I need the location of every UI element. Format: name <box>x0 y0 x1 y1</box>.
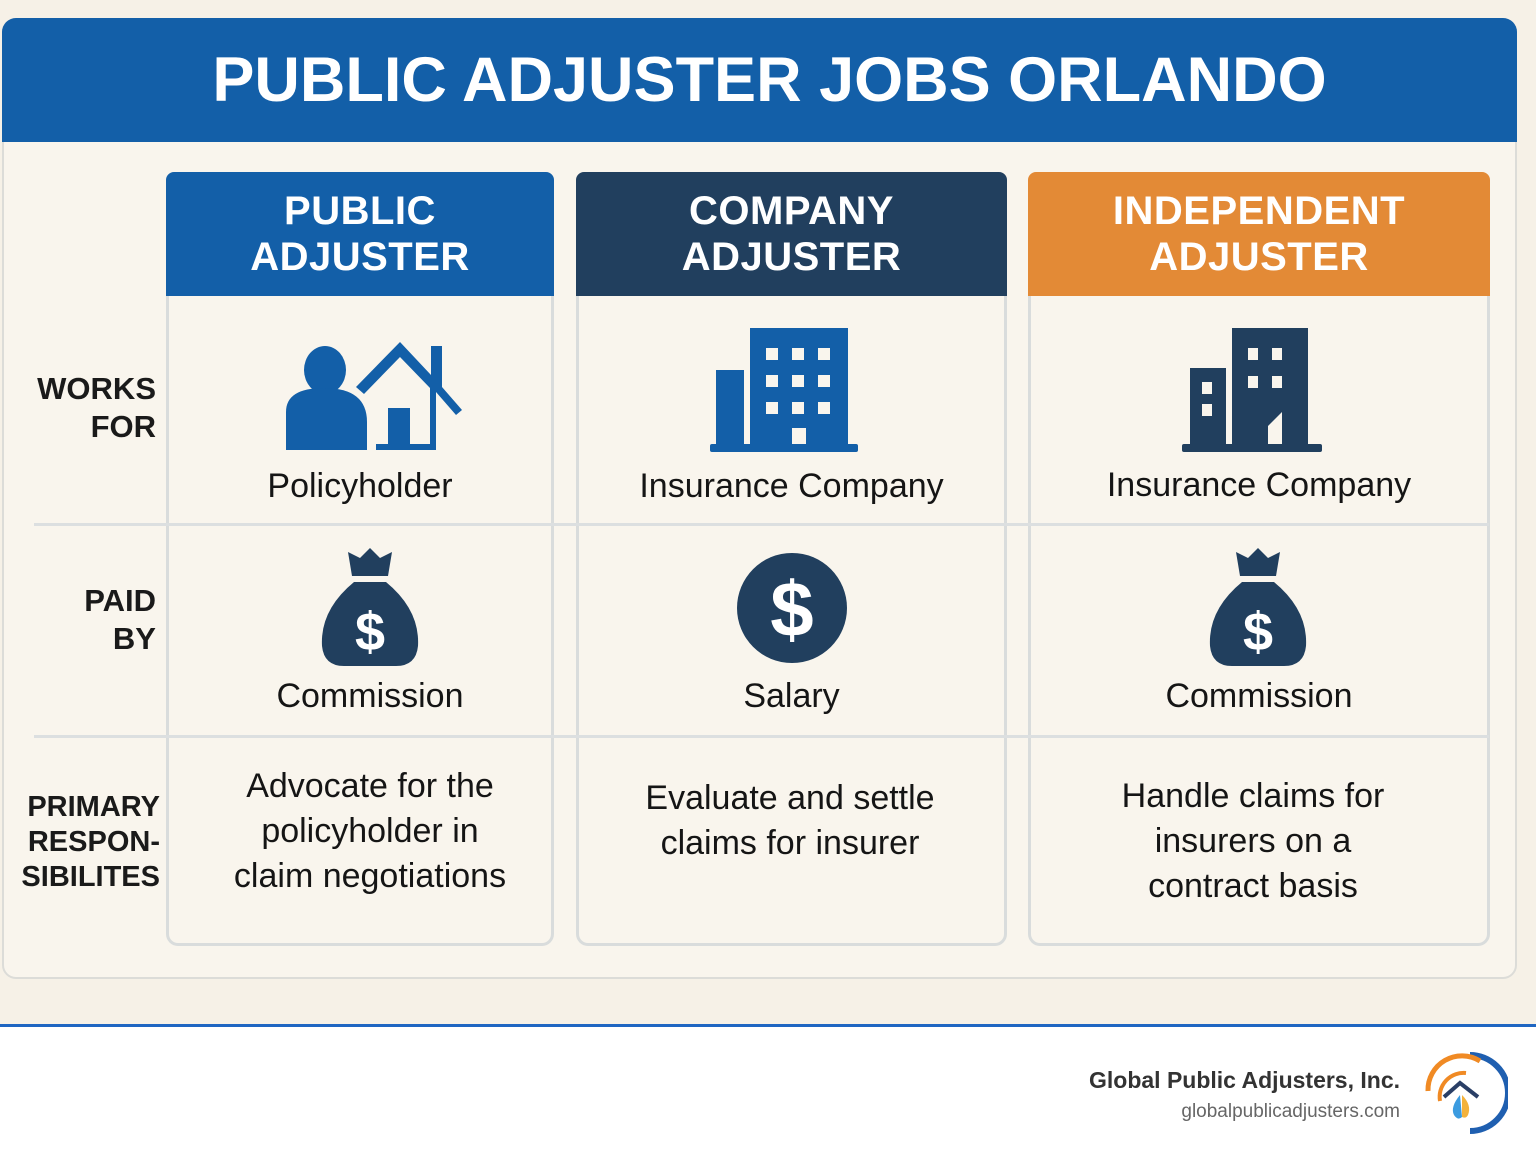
icon: dollar coin: $ <box>770 565 814 653</box>
header: company adjuster: COMPANY <box>689 189 894 233</box>
text: commission 2: Commission <box>1165 677 1353 715</box>
header: public adjuster: PUBLIC <box>284 189 436 233</box>
label: primary responsibilities: SIBILITES <box>21 861 160 893</box>
icon: office building <box>710 328 858 452</box>
text: insurance company 2: Insurance Company <box>1107 466 1411 504</box>
text: public responsibilities: claim negotiations <box>234 857 506 895</box>
header: independent adjuster: ADJUSTER <box>1149 235 1369 279</box>
icon: person and house <box>286 342 462 450</box>
column: public adjuster <box>166 294 554 946</box>
label: paid by <box>84 583 156 656</box>
label: primary responsibilities: RESPON- <box>28 826 160 858</box>
title: PUBLIC ADJUSTER JOBS ORLANDO <box>212 45 1327 115</box>
label: paid by: BY <box>113 621 156 656</box>
icon: money bag 2: $ <box>1243 602 1273 662</box>
icon: money bag 1: $ <box>355 602 385 662</box>
icon: money bag 1 <box>322 548 418 666</box>
icon: money bag 2 <box>1210 548 1306 666</box>
text: salary: Salary <box>743 677 840 715</box>
text: public responsibilities <box>234 767 506 895</box>
label: works for <box>37 371 156 444</box>
text: insurance company: Insurance Company <box>639 467 944 505</box>
logo <box>1426 1052 1508 1134</box>
label: works for: FOR <box>91 409 156 444</box>
title <box>2 18 1517 142</box>
header: independent adjuster: INDEPENDENT <box>1113 189 1405 233</box>
header: independent adjuster <box>1028 172 1490 296</box>
company name: Global Public Adjusters, Inc. <box>1089 1067 1400 1093</box>
column: independent adjuster <box>1028 294 1490 946</box>
text: public responsibilities: policyholder in <box>261 812 479 850</box>
icon: dark building <box>1182 328 1322 452</box>
label: works for: WORKS <box>37 371 156 406</box>
text: commission 1: Commission <box>276 677 464 715</box>
row dividers <box>34 523 1489 526</box>
footer <box>0 1024 1536 1154</box>
header: company adjuster <box>576 172 1007 296</box>
text: company responsibilities <box>645 779 935 862</box>
text: company responsibilities: claims for insurer <box>661 824 919 862</box>
text: independent responsibilities: contract basis <box>1148 867 1358 905</box>
text: policyholder: Policyholder <box>267 467 453 505</box>
icon: dollar coin <box>737 553 847 663</box>
url: globalpublicadjusters.com <box>1181 1101 1400 1122</box>
label: primary responsibilities: PRIMARY <box>27 791 160 823</box>
column: company adjuster <box>576 294 1007 946</box>
text: independent responsibilities <box>1122 777 1384 905</box>
label: primary responsibilities <box>21 791 160 893</box>
text: independent responsibilities: Handle claims for <box>1122 777 1384 815</box>
text: public responsibilities: Advocate for the <box>246 767 494 805</box>
text: company responsibilities: Evaluate and settle <box>645 779 935 817</box>
text: independent responsibilities: insurers on a <box>1155 822 1351 860</box>
header: public adjuster <box>166 172 554 296</box>
header: company adjuster: ADJUSTER <box>682 235 901 279</box>
header: public adjuster: ADJUSTER <box>250 235 470 279</box>
label: paid by: PAID <box>84 583 156 618</box>
